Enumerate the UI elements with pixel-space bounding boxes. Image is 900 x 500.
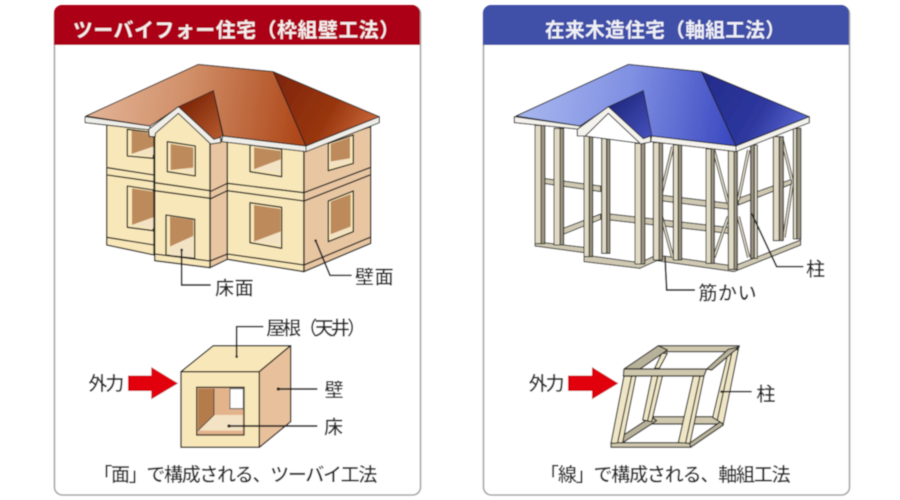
blue roof [514, 64, 809, 152]
header: two-by-four [54, 5, 420, 45]
callout: wall: 壁 [325, 380, 344, 402]
house walls [107, 112, 371, 272]
callout: wall surface [314, 239, 394, 288]
panel: conventional wooden house [483, 5, 850, 495]
callout: post: 柱 [756, 384, 775, 406]
header: conventional [483, 5, 849, 45]
callout: floor [227, 416, 343, 438]
callout: floor: 床 [324, 416, 343, 438]
callout: wall surface: 壁面 [355, 266, 394, 288]
beams and sills [535, 178, 801, 272]
braces [661, 137, 792, 257]
label: external force: 外力 [88, 373, 124, 395]
caption: 「面」で構成される、ツーバイ工法 [93, 464, 377, 486]
callout: post: 柱 [806, 258, 825, 280]
caption: 「線」で構成される、軸組工法 [540, 464, 791, 486]
cube [181, 346, 291, 447]
floor bands [107, 168, 370, 265]
callout: roof: 屋根（天井） [266, 318, 366, 340]
arrow: external force [568, 368, 618, 399]
header: conventional: 在来木造住宅（軸組工法） [545, 20, 785, 42]
diagram: surface cube [88, 318, 377, 486]
callout: wall [277, 380, 344, 402]
posts [535, 125, 801, 269]
label: external force: 外力 [529, 373, 565, 395]
callout: post [752, 213, 825, 280]
header: two-by-four: ツーバイフォー住宅（枠組壁工法） [73, 20, 399, 42]
frame [611, 346, 739, 447]
diagram: line frame [529, 346, 791, 486]
arrow: external force [128, 368, 177, 399]
panel: two-by-four house [54, 5, 420, 495]
callout: floor surface [180, 249, 254, 299]
windows [127, 129, 353, 258]
callout: roof [235, 318, 366, 358]
red roof [85, 64, 379, 152]
illustration: timber frame house [514, 64, 825, 304]
illustration: two-by-four house [85, 64, 394, 299]
callout: post [720, 384, 775, 406]
callout: brace [665, 257, 757, 304]
callout: brace: 筋かい [698, 282, 757, 304]
callout: floor surface: 床面 [215, 277, 254, 299]
